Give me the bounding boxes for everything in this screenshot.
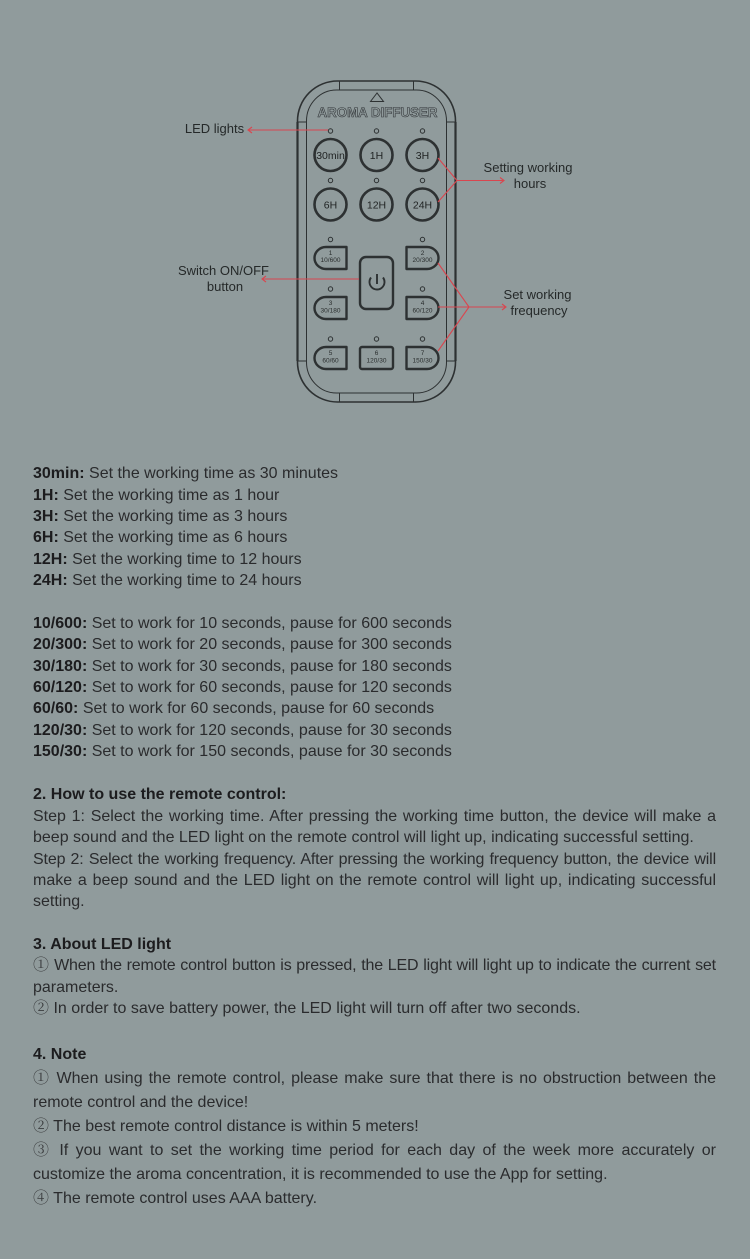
working time list (33, 465, 338, 589)
working time list: 12H: Set the working time to 12 hours (33, 551, 302, 568)
working time button labels: 3H (416, 150, 429, 162)
section 2: how to use (33, 786, 716, 910)
frequency buttons (314, 247, 438, 369)
callout labels: hours (514, 176, 547, 191)
section 3: about LED light: ① When the remote control button is pressed, the LED light will light up to indicate the current set (33, 952, 716, 975)
frequency button labels: 60/120 (413, 308, 433, 314)
frequency button labels: 7 (421, 350, 425, 357)
section 4: note: ② The best remote control distance is within 5 meters! (33, 1113, 419, 1136)
frequency button labels: 120/30 (367, 358, 387, 364)
section 3: about LED light: ② In order to save battery power, the LED light will turn off after two seconds. (33, 995, 581, 1018)
working frequency list: 20/300: Set to work for 20 seconds, pause for 300 seconds (33, 636, 452, 653)
section 4: note: ④ The remote control uses AAA battery. (33, 1185, 317, 1208)
frequency button labels: 150/30 (413, 358, 433, 364)
working time button labels: 1H (370, 150, 383, 162)
frequency button labels: 2 (421, 250, 425, 257)
callout labels: LED lights (185, 121, 245, 136)
frequency button labels: 60/60 (322, 358, 339, 364)
working time list: 3H: Set the working time as 3 hours (33, 508, 287, 525)
section 2: how to use: Step 1: Select the working time. After pressing the working time button, the device will make a (33, 808, 716, 825)
frequency button labels: 20/300 (413, 257, 433, 264)
icon: power symbol (370, 274, 385, 290)
frequency button labels: 10/600 (321, 257, 341, 264)
frequency button labels: 5 (329, 350, 333, 357)
working frequency list: 120/30: Set to work for 120 seconds, pause for 30 seconds (33, 722, 452, 739)
section 4: note: ① When using the remote control, please make sure that there is no obstruction between the (33, 1065, 716, 1088)
callout labels (178, 121, 572, 318)
callout labels: frequency (510, 303, 568, 318)
section 3: about LED light (33, 936, 716, 1018)
section 2: how to use: 2. How to use the remote control: (33, 786, 286, 803)
callout labels: Switch ON/OFF (178, 263, 269, 278)
section 2: how to use: Step 2: Select the working frequency. After pressing the working frequency button, the device will (33, 851, 716, 868)
frequency button labels: 4 (421, 300, 425, 307)
section 2: how to use: make a beep sound and the LED light on the remote control will light up, indicating successful (33, 872, 716, 889)
working time list: 1H: Set the working time as 1 hour (33, 487, 279, 504)
section 4: note (33, 1046, 716, 1208)
working frequency list: 60/60: Set to work for 60 seconds, pause for 60 seconds (33, 700, 434, 717)
section 3: about LED light: parameters. (33, 979, 118, 996)
frequency button labels: 6 (375, 350, 379, 357)
remote body outline (297, 81, 456, 402)
frequency button labels: 3 (329, 300, 333, 307)
working time buttons (314, 139, 438, 220)
callout labels: Set working (504, 287, 571, 302)
working frequency list: 60/120: Set to work for 60 seconds, pause for 120 seconds (33, 679, 452, 696)
section 2: how to use: setting. (33, 893, 85, 910)
remote control diagram (178, 80, 572, 403)
section 3: about LED light: 3. About LED light (33, 936, 171, 953)
working time button labels: 6H (324, 200, 337, 212)
power button (360, 257, 393, 309)
working time button labels: 24H (413, 200, 432, 212)
section 4: note: remote control and the device! (33, 1094, 248, 1111)
section 2: how to use: beep sound and the LED light on the remote control will light up, indicating successful setting. (33, 829, 694, 846)
frequency button labels (321, 250, 433, 364)
working frequency list: 30/180: Set to work for 30 seconds, pause for 180 seconds (33, 658, 452, 675)
working time list: 24H: Set the working time to 24 hours (33, 572, 302, 589)
LED indicators (328, 129, 425, 341)
frequency button labels: 1 (329, 250, 333, 257)
working frequency list: 10/600: Set to work for 10 seconds, pause for 600 seconds (33, 615, 452, 632)
section 4: note: customize the aroma concentration, it is recommended to use the App for setting. (33, 1166, 608, 1183)
working time button labels: 30min (316, 150, 345, 162)
callout labels: Setting working (484, 160, 572, 175)
working frequency list (33, 615, 452, 760)
section 4: note: ③ If you want to set the working time period for each day of the week more accurately or (33, 1137, 716, 1160)
callout labels: button (207, 279, 243, 294)
working time list: 30min: Set the working time as 30 minutes (33, 465, 338, 482)
working time list: 6H: Set the working time as 6 hours (33, 529, 287, 546)
working time button labels (316, 150, 432, 212)
section 4: note: 4. Note (33, 1046, 86, 1063)
working frequency list: 150/30: Set to work for 150 seconds, pause for 30 seconds (33, 743, 452, 760)
brand name: AROMA DIFFUSER (318, 105, 438, 120)
frequency button labels: 30/180 (321, 308, 341, 314)
icon: triangle (370, 93, 384, 102)
annotation arrows (248, 127, 506, 351)
working time button labels: 12H (367, 200, 386, 212)
